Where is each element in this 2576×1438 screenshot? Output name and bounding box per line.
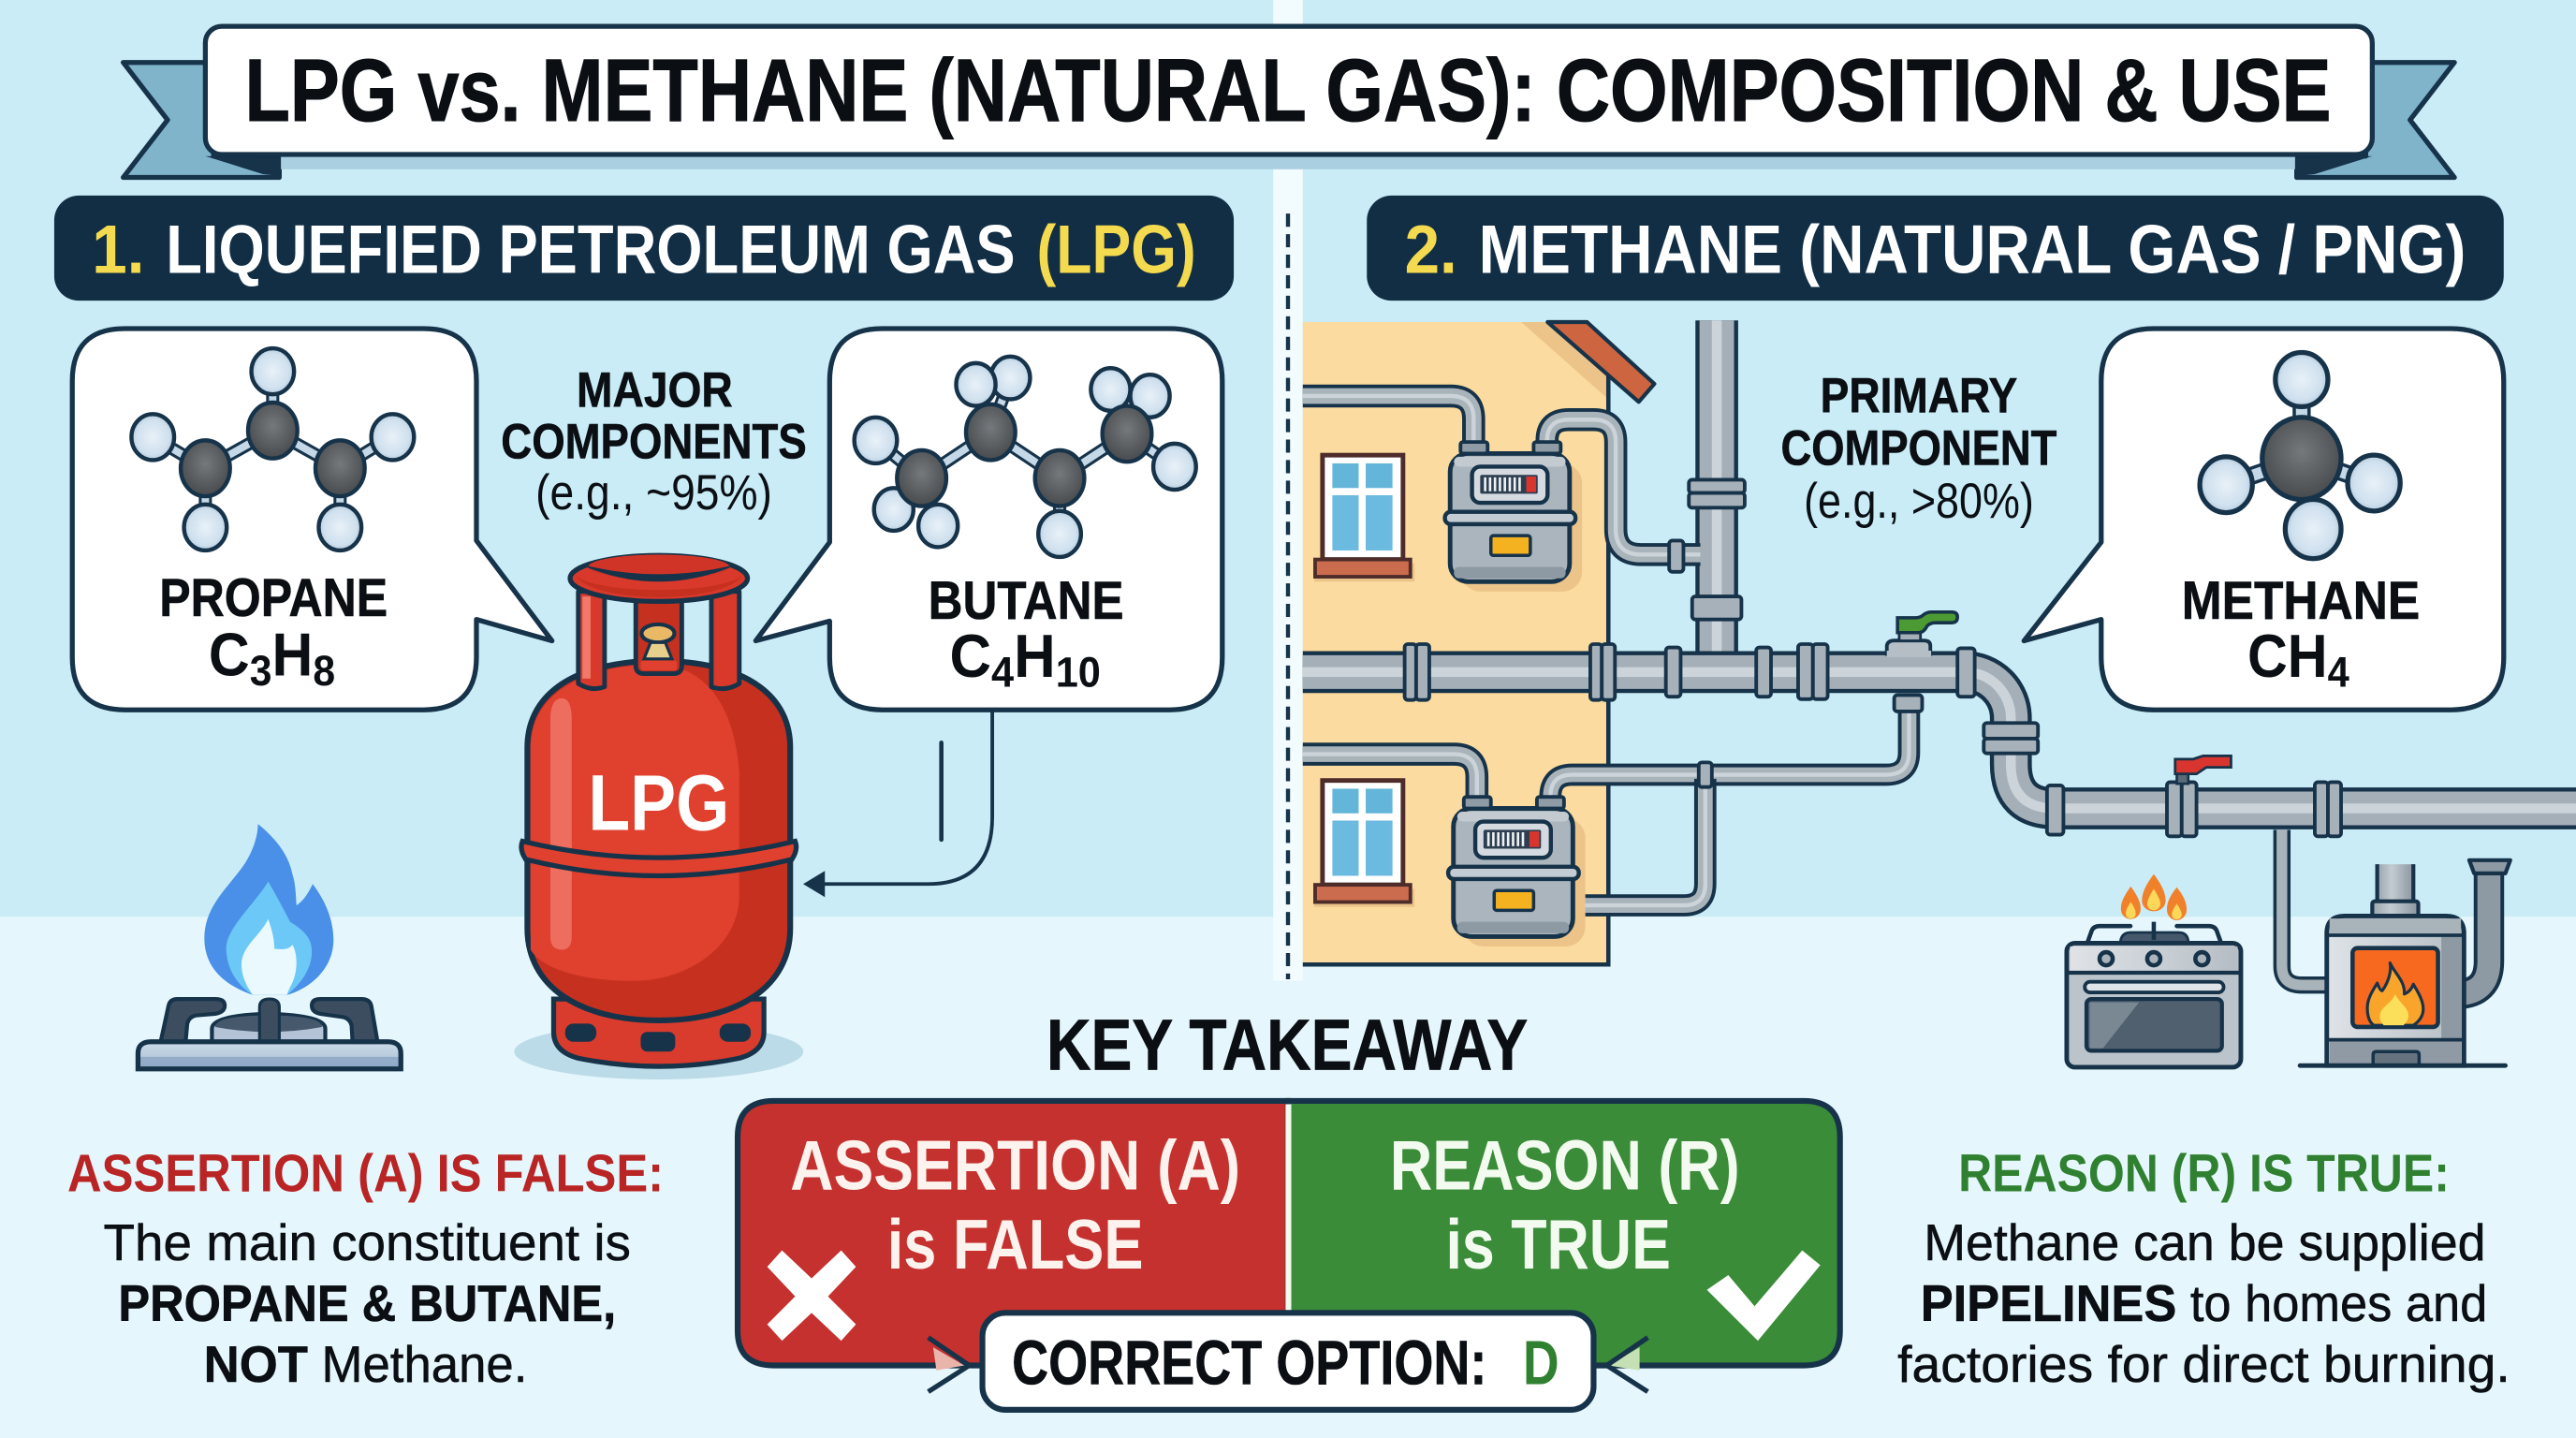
text: reason explanation: PIPELINES to homes and — [1921, 1275, 2487, 1332]
correct option box — [983, 1313, 1593, 1410]
text: major components: (e.g., ~95%) — [535, 465, 772, 521]
centre rule — [1285, 1104, 1292, 1362]
background: upper sky — [0, 0, 2576, 917]
fire window — [2352, 948, 2438, 1027]
icon: cross — [768, 1251, 856, 1341]
section heading 1 — [54, 196, 1234, 301]
cylinder neck — [636, 598, 681, 674]
formula: methane: 4 — [2328, 649, 2349, 697]
label: methane: METHANE — [2182, 571, 2420, 631]
title banner — [124, 26, 2454, 178]
window: bottom — [1314, 781, 1414, 907]
stove flames — [2121, 874, 2187, 920]
text: assertion explanation — [67, 1143, 664, 1393]
chevron: left — [929, 1338, 970, 1392]
formula: butane: C — [949, 622, 993, 690]
verdict panel — [738, 1101, 1840, 1365]
stove grate — [2087, 926, 2221, 943]
cylinder posts — [578, 592, 605, 689]
burner base — [138, 1042, 401, 1069]
gas meter: bottom — [1448, 797, 1586, 946]
correct option box: D — [1523, 1329, 1559, 1399]
formula: butane: 4 — [991, 649, 1015, 697]
dashed divider — [1287, 213, 1289, 979]
burner grate left — [161, 999, 225, 1042]
section heading 1: (LPG) — [1036, 210, 1196, 287]
molecule: propane — [131, 348, 414, 550]
label: butane: BUTANE — [929, 571, 1123, 631]
text: assertion — [790, 1126, 1240, 1284]
formula: methane: CH — [2247, 622, 2335, 690]
window: top — [1314, 455, 1414, 581]
text: reason: REASON (R) — [1390, 1126, 1740, 1205]
section heading 2: METHANE (NATURAL GAS / PNG) — [1479, 210, 2466, 287]
formula: butane: H — [1014, 622, 1056, 690]
background: centre divider strip — [1273, 0, 1303, 981]
title box — [205, 26, 2372, 154]
valve: green — [1887, 612, 1957, 657]
text: reason explanation — [1897, 1143, 2510, 1393]
panel: reason true — [1288, 1101, 1840, 1365]
text: reason explanation: REASON (R) IS TRUE: — [1958, 1143, 2450, 1202]
cylinder top ring — [570, 555, 748, 601]
formula: propane: 8 — [313, 647, 335, 695]
section heading 2: 2. — [1405, 210, 1457, 287]
arrow: butane to cylinder — [807, 710, 992, 894]
label: propane: PROPANE — [159, 568, 388, 628]
molecule: methane — [2200, 352, 2400, 559]
furnace body — [2327, 916, 2464, 1065]
formula: propane: H — [271, 620, 313, 688]
text: major components — [501, 362, 807, 521]
background: lower floor — [0, 917, 2576, 1438]
exhaust pipe — [2456, 871, 2489, 994]
gas meter: top — [1445, 442, 1582, 592]
text: assertion: is FALSE — [887, 1205, 1144, 1284]
ribbon: right — [2297, 63, 2454, 178]
text: primary component — [1781, 369, 2056, 529]
pipe flanges — [1405, 479, 2341, 836]
heading: key takeaway: KEY TAKEAWAY — [1046, 1005, 1528, 1086]
section heading 1: 1. — [92, 210, 144, 287]
cylinder shadow — [514, 1023, 803, 1079]
burner grate right — [312, 999, 377, 1042]
formula: propane: 3 — [250, 647, 271, 695]
text: assertion explanation: The main constituent is — [104, 1214, 631, 1271]
text: major components: COMPONENTS — [501, 415, 807, 470]
panel: assertion false — [738, 1101, 1288, 1365]
molecule: butane — [855, 357, 1196, 557]
text: assertion: ASSERTION (A) — [790, 1126, 1240, 1205]
correct option box: CORRECT OPTION: — [1012, 1329, 1486, 1399]
ribbon: left — [124, 63, 279, 178]
bubble: propane — [72, 329, 552, 710]
main gas pipeline — [1303, 672, 2576, 809]
icon: check mark — [1707, 1251, 1821, 1341]
text: assertion explanation: ASSERTION (A) IS FALSE: — [67, 1143, 664, 1202]
text: reason explanation: factories for direct burning. — [1897, 1336, 2510, 1393]
cylinder band — [521, 842, 797, 875]
section heading 1: LIQUEFIED PETROLEUM GAS — [166, 210, 1016, 287]
chimney — [2378, 864, 2413, 902]
cylinder base — [553, 999, 764, 1066]
text: primary component: (e.g., >80%) — [1804, 474, 2034, 529]
cylinder body — [527, 661, 790, 1020]
text: reason explanation: Methane can be supplied — [1924, 1214, 2485, 1271]
text: reason — [1390, 1126, 1740, 1284]
pipe network — [1303, 320, 2576, 985]
icon: gas stove — [2067, 874, 2241, 1067]
stove body — [2067, 943, 2241, 1067]
roof — [1547, 322, 1654, 402]
vertical riser pipe — [1716, 320, 1718, 657]
branch pipes — [1303, 396, 2328, 985]
banner shadow — [281, 156, 2295, 169]
icon: furnace — [2300, 860, 2510, 1065]
section heading 2 — [1367, 196, 2504, 301]
bubble: butane — [755, 329, 1222, 710]
text: primary component: COMPONENT — [1781, 421, 2056, 477]
icon: blue gas burner — [138, 824, 401, 1069]
text: major components: MAJOR — [577, 362, 733, 418]
text: assertion explanation: PROPANE & BUTANE, — [118, 1275, 616, 1332]
bubble: methane — [2024, 329, 2504, 710]
valve: red — [2175, 756, 2231, 784]
furnace ground line — [2300, 1064, 2506, 1067]
formula: propane: C — [209, 620, 253, 688]
flame — [204, 824, 333, 995]
icon: LPG cylinder — [514, 554, 803, 1079]
burner cap — [212, 1014, 326, 1042]
text: primary component: PRIMARY — [1821, 369, 2017, 424]
text: reason: is TRUE — [1445, 1205, 1671, 1284]
valve — [641, 624, 674, 659]
house wall — [1303, 322, 1654, 964]
chevron: right — [1606, 1338, 1647, 1392]
text: assertion explanation: NOT Methane. — [204, 1336, 527, 1393]
cylinder label: LPG — [588, 758, 729, 846]
formula: butane: 10 — [1056, 649, 1101, 697]
ribbon folds — [205, 156, 2372, 176]
